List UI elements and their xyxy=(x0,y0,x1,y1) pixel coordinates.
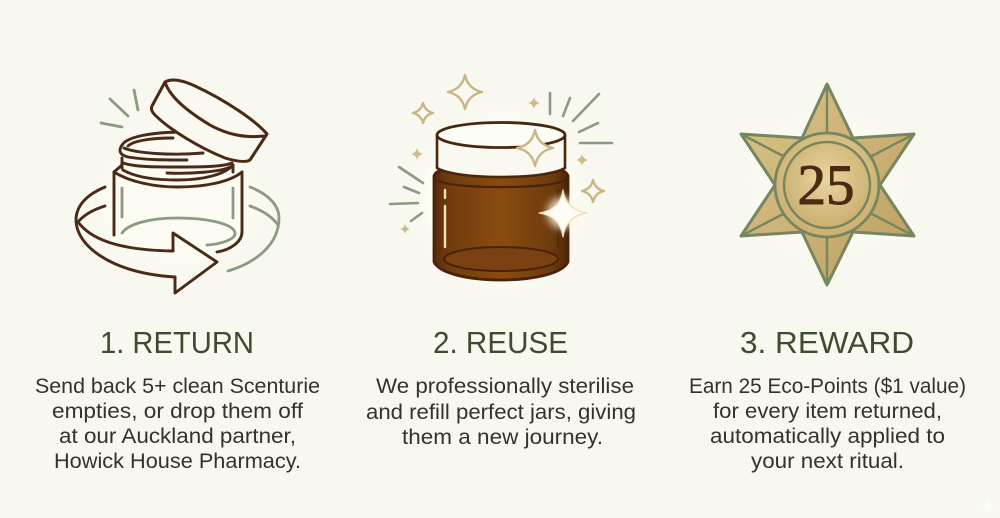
text block: reward description: Earn 25 Eco-Points ($1 value) xyxy=(689,375,966,398)
text block: reuse description: them a new journey. xyxy=(402,426,603,449)
text block: return description: empties, or drop them off xyxy=(52,400,303,423)
text block: return description xyxy=(35,375,320,473)
text block: return description: at our Auckland partner, xyxy=(59,425,296,448)
text block: reuse description: and refill perfect jars, giving xyxy=(366,401,636,424)
icon: amber jar with sparkles xyxy=(390,75,612,284)
text block: return description: Howick House Pharmacy. xyxy=(54,450,301,473)
badge number: 25 xyxy=(798,154,854,217)
jar body xyxy=(434,170,568,280)
icon: 25 Eco-Points star badge xyxy=(741,84,914,285)
text block: reuse description xyxy=(366,375,636,449)
text block: reuse description: We professionally sterilise xyxy=(376,375,634,398)
heading: 2. REUSE: 2. REUSE xyxy=(433,325,568,360)
text block: reward description: for every item returned, xyxy=(713,400,942,423)
jar lid xyxy=(437,122,565,177)
icon: returning jar with rotation arrow xyxy=(76,80,279,293)
text block: reward description xyxy=(689,375,966,473)
text block: reward description: your next ritual. xyxy=(751,450,904,473)
heading: 1. RETURN: 1. RETURN xyxy=(100,325,254,360)
text block: reward description: automatically applied to xyxy=(710,425,945,448)
text block: return description: Send back 5+ clean Scenturie xyxy=(35,375,320,398)
icon: faint corner sparkle xyxy=(978,492,998,518)
sparkle rays xyxy=(390,93,612,221)
sparkles xyxy=(413,75,604,202)
heading: 3. REWARD: 3. REWARD xyxy=(740,325,914,360)
